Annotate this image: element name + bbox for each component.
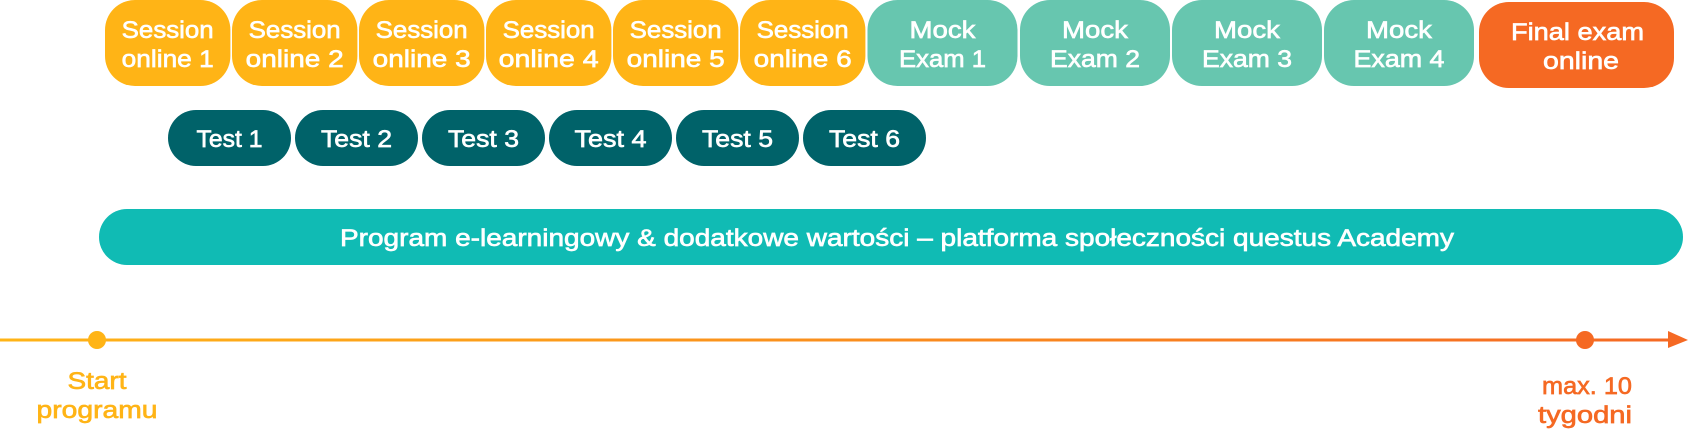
session online 5: Session: [630, 17, 722, 44]
session online 6: Session: [757, 17, 849, 44]
mock exam 2: Exam 2: [1050, 46, 1140, 73]
session online 6: online 6: [754, 46, 852, 73]
session online 1: online 1: [122, 46, 214, 73]
end label: max. 10: [1542, 373, 1632, 400]
session online 3: [359, 0, 484, 86]
end label: [1538, 373, 1632, 429]
session online 4: Session: [503, 17, 595, 44]
mock exam 1: Mock: [910, 17, 977, 44]
e-learning program bar: [99, 209, 1683, 265]
session online 2: Session: [249, 17, 341, 44]
test 6: Test 6: [829, 126, 900, 153]
session online 1: [105, 0, 230, 86]
test 2: Test 2: [321, 126, 392, 153]
mock exam 3: Exam 3: [1202, 46, 1292, 73]
test 6: [803, 110, 926, 166]
session online 2: [232, 0, 357, 86]
mock exam 2: Mock: [1062, 17, 1129, 44]
end marker: [1576, 331, 1594, 349]
test 5: Test 5: [702, 126, 773, 153]
session online 3: Session: [376, 17, 468, 44]
test 4: Test 4: [574, 126, 646, 153]
session online 4: [486, 0, 611, 86]
mock exam 2: [1020, 0, 1170, 86]
final exam online: online: [1543, 48, 1619, 75]
test 4: [549, 110, 672, 166]
test 5: [676, 110, 799, 166]
timeline arrow: [0, 331, 1688, 348]
mock exam 3: Mock: [1214, 17, 1281, 44]
test 3: Test 3: [448, 126, 519, 153]
e-learning program bar: Program e-learningowy & dodatkowe wartości – platforma społeczności questus Academy: [340, 225, 1454, 252]
start label: [36, 368, 158, 424]
start marker: [88, 331, 106, 349]
start label: programu: [36, 397, 158, 424]
session online 4: online 4: [499, 46, 599, 73]
session online 1: Session: [122, 17, 214, 44]
session online 6: [740, 0, 865, 86]
test 1: [168, 110, 291, 166]
mock exam 1: Exam 1: [899, 46, 986, 73]
mock exam 4: [1324, 0, 1474, 86]
test 1: Test 1: [196, 126, 262, 153]
mock exam 4: Exam 4: [1354, 46, 1444, 73]
start label: Start: [68, 368, 127, 395]
end label: tygodni: [1538, 402, 1632, 429]
session online 2: online 2: [246, 46, 344, 73]
session online 3: online 3: [373, 46, 471, 73]
mock exam 4: Mock: [1366, 17, 1433, 44]
test 3: [422, 110, 545, 166]
final exam online: [1479, 2, 1674, 88]
mock exam 1: [868, 0, 1018, 86]
session online 5: online 5: [627, 46, 725, 73]
test 2: [295, 110, 418, 166]
mock exam 3: [1172, 0, 1322, 86]
session online 5: [613, 0, 738, 86]
final exam online: Final exam: [1511, 19, 1644, 46]
